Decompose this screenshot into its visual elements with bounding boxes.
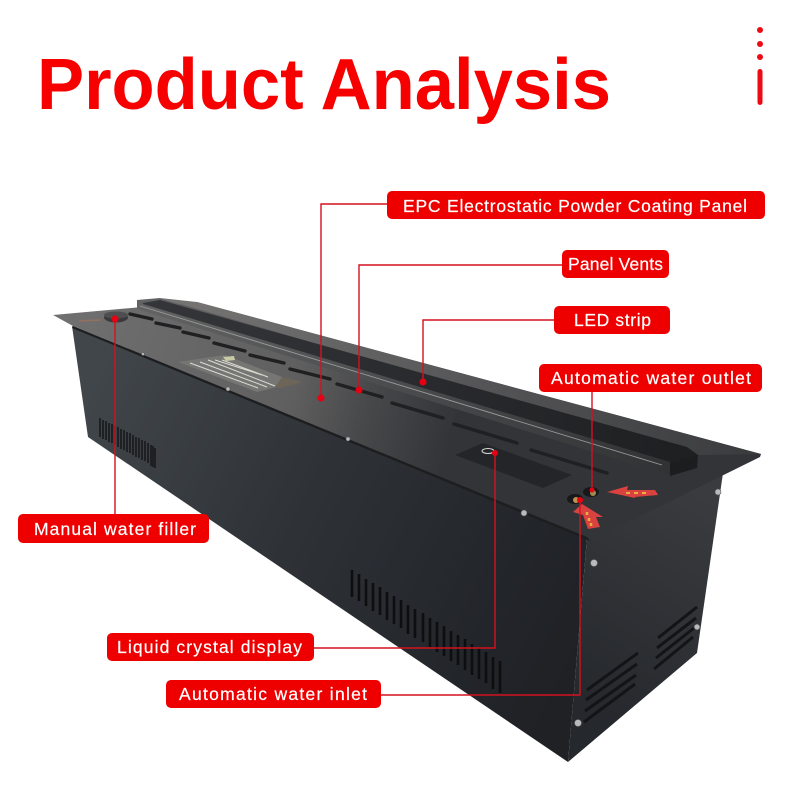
front vents	[352, 570, 500, 693]
liquid crystal display panel	[455, 443, 572, 488]
label: LED strip	[554, 306, 670, 334]
icon: decorative dots and bar	[757, 27, 763, 105]
top vent slots	[130, 314, 607, 473]
label: Manual water filler: Manual water filler	[34, 519, 196, 539]
label: Liquid crystal display: Liquid crystal display	[117, 637, 302, 657]
label: LED strip: LED strip	[574, 310, 651, 330]
label: Automatic water inlet	[166, 680, 381, 708]
label: Automatic water inlet: Automatic water inlet	[179, 684, 367, 704]
label: EPC Electrostatic Powder Coating Panel	[387, 191, 765, 219]
label: EPC Electrostatic Powder Coating Panel: EPC Electrostatic Powder Coating Panel	[403, 196, 747, 216]
label: Panel Vents: Panel Vents	[568, 254, 663, 274]
leader: EPC panel	[318, 204, 387, 402]
front face of box	[72, 326, 587, 762]
leader: manual filler	[112, 316, 118, 514]
leader: panel vents	[356, 265, 562, 394]
leader: water inlet	[381, 497, 583, 695]
leader: liquid crystal display	[314, 450, 498, 648]
title: Product Analysis	[37, 45, 611, 125]
right side face of box	[568, 473, 723, 762]
outlet holes and arrows	[567, 486, 658, 529]
manual filler cap	[79, 312, 128, 322]
screws	[142, 352, 721, 726]
right side vents	[584, 607, 697, 722]
left vents	[100, 418, 155, 468]
printed rating label	[178, 355, 303, 392]
top flange panel	[53, 302, 761, 540]
leader: water outlet	[590, 392, 594, 492]
leader: LED strip	[420, 320, 554, 386]
label: Manual water filler	[18, 514, 209, 543]
label: Liquid crystal display	[107, 633, 314, 661]
product: electric fireplace	[53, 298, 761, 762]
label: Automatic water outlet: Automatic water outlet	[551, 368, 751, 388]
raised rear bar	[137, 298, 698, 476]
label: Automatic water outlet	[539, 364, 762, 392]
label: Panel Vents	[562, 250, 669, 278]
rear flange strip	[160, 298, 761, 455]
